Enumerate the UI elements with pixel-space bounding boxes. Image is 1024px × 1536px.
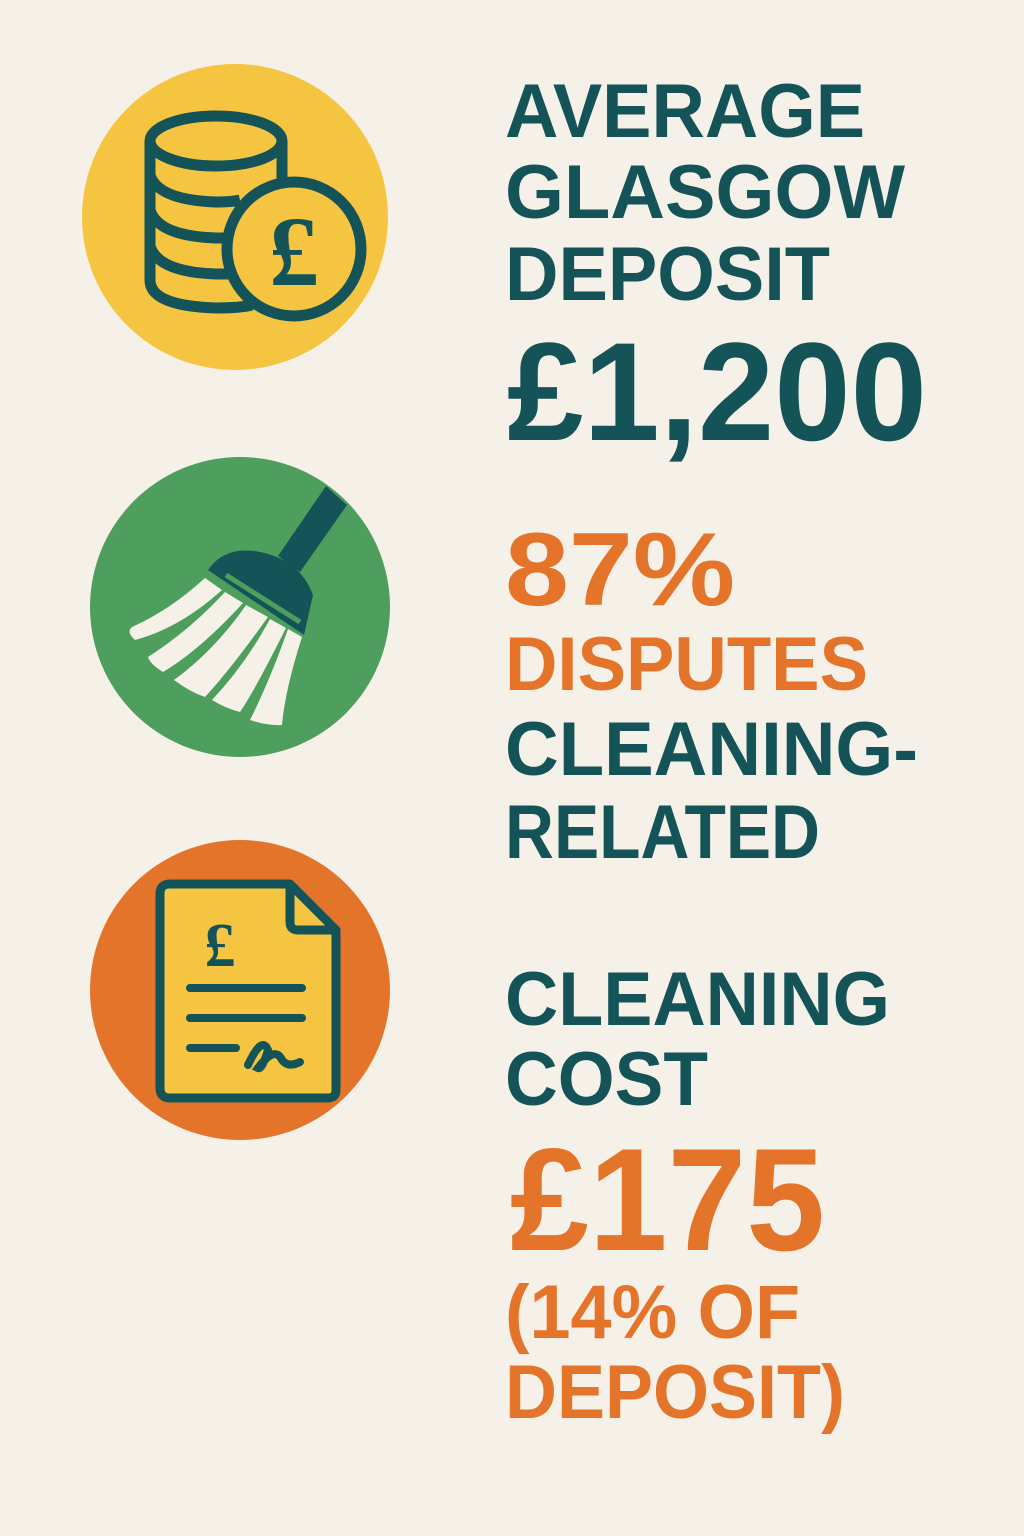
icon: coins in yellow circle: £ <box>269 196 319 307</box>
heading: average glasgow deposit <box>505 69 905 317</box>
heading: average glasgow deposit: GLASGOW <box>505 150 905 235</box>
stat: 87% disputes: DISPUTES <box>505 622 868 707</box>
icon: broom in green circle <box>90 457 390 757</box>
heading: cleaning cost: CLEANING <box>505 957 890 1042</box>
icon: invoice in orange circle: £ <box>204 912 236 980</box>
stat: 87% disputes: RELATED <box>505 790 820 875</box>
heading: cleaning cost <box>505 957 890 1122</box>
stat: £175 (14% of deposit) <box>505 1118 845 1435</box>
stat: £175 (14% of deposit): (14% OF <box>505 1270 800 1355</box>
stat: 87% disputes: 87% <box>505 512 735 628</box>
stat: 87% disputes <box>505 512 918 875</box>
heading: average glasgow deposit: AVERAGE <box>505 69 865 154</box>
heading: cleaning cost: COST <box>505 1037 708 1122</box>
stat: £1,200: £1,200 <box>507 313 927 470</box>
stat: £175 (14% of deposit): DEPOSIT) <box>505 1350 845 1435</box>
heading: average glasgow deposit: DEPOSIT <box>505 232 830 317</box>
icon: invoice in orange circle <box>90 840 390 1140</box>
icon: coins in yellow circle <box>82 64 388 370</box>
stat: 87% disputes: CLEANING- <box>505 707 918 792</box>
stat: £175 (14% of deposit): £175 <box>510 1118 825 1281</box>
